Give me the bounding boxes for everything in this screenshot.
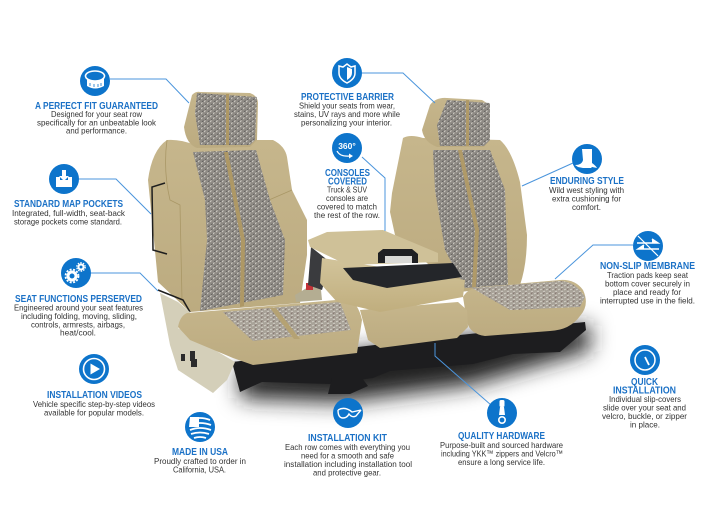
heading: SEAT FUNCTIONS PERSERVED bbox=[15, 294, 142, 305]
text bbox=[549, 185, 624, 212]
text: Shield your seats from wear, bbox=[299, 100, 395, 110]
left seat cushion bbox=[178, 299, 362, 365]
text: Vehicle specific step-by-step videos bbox=[33, 399, 155, 409]
text bbox=[294, 100, 400, 128]
text: storage pockets come standard. bbox=[14, 216, 122, 226]
seat illustration bbox=[148, 92, 586, 394]
text: Truck & SUV bbox=[327, 184, 367, 194]
icon: play bbox=[79, 354, 109, 384]
right headrest bbox=[422, 98, 490, 147]
heading: PROTECTIVE BARRIER bbox=[301, 92, 394, 103]
heading: INSTALLATION KIT bbox=[308, 433, 388, 444]
icon: shield bbox=[332, 58, 362, 88]
icon: non-slip arrows bbox=[633, 231, 663, 261]
console handle bbox=[378, 249, 418, 263]
text: Proudly crafted to order in bbox=[154, 456, 246, 466]
text bbox=[12, 208, 126, 226]
text: slide over your seat and bbox=[603, 402, 686, 412]
icon: zipper bbox=[487, 398, 517, 428]
elastic straps bbox=[152, 183, 190, 312]
callout: non-slip membrane bbox=[555, 231, 695, 306]
heading: ENDURING STYLE bbox=[550, 176, 624, 187]
icon: gauge bbox=[630, 345, 660, 375]
text: place and ready for bbox=[613, 287, 681, 297]
text bbox=[154, 456, 246, 474]
text: extra cushioning for bbox=[552, 194, 621, 204]
left cushion fabric bbox=[223, 302, 351, 341]
icon: pocket bbox=[49, 164, 79, 194]
callout: quick installation bbox=[602, 345, 687, 430]
text bbox=[314, 184, 380, 220]
text: need for a smooth and safe bbox=[301, 450, 394, 460]
connector bbox=[435, 343, 491, 405]
right seat back fabric bbox=[433, 150, 508, 288]
text: and protective gear. bbox=[313, 468, 381, 478]
heading: STANDARD MAP POCKETS bbox=[14, 199, 123, 210]
heading: NON-SLIP MEMBRANE bbox=[600, 261, 695, 272]
heading: QUICK bbox=[631, 377, 658, 388]
text: comfort. bbox=[572, 202, 601, 212]
text: stains, UV rays and more while bbox=[294, 109, 400, 119]
text: Traction pads keep seat bbox=[607, 270, 689, 280]
callout: installation videos bbox=[33, 354, 155, 418]
right headrest fabric bbox=[437, 100, 490, 146]
icon: goggles bbox=[333, 398, 363, 428]
text: including folding, moving, sliding, bbox=[21, 311, 137, 321]
heading bbox=[325, 168, 370, 188]
text: California, USA. bbox=[173, 464, 226, 474]
callout: map pockets bbox=[12, 164, 151, 226]
heading: INSTALLATION bbox=[613, 386, 676, 396]
console lid bbox=[308, 230, 438, 265]
icon: 360: 360° bbox=[338, 141, 356, 151]
callout: protective barrier bbox=[294, 58, 435, 128]
text bbox=[600, 270, 695, 306]
right cushion fabric bbox=[472, 281, 585, 310]
text: the rest of the row. bbox=[314, 210, 380, 220]
console lower body bbox=[320, 258, 465, 312]
right seat back bbox=[390, 136, 527, 292]
text: controls, armrests, airbags, bbox=[31, 320, 125, 330]
connector bbox=[91, 273, 158, 291]
heading bbox=[613, 377, 676, 396]
left seat back panel edge bbox=[166, 140, 292, 300]
icon: flag bbox=[185, 412, 215, 442]
text: consoles are bbox=[326, 193, 368, 203]
icon: gears bbox=[61, 258, 91, 288]
text: velcro, buckle, or zipper bbox=[602, 411, 687, 421]
heading: CONSOLES bbox=[325, 168, 370, 179]
center seat base bbox=[360, 302, 468, 348]
left seat back bbox=[148, 140, 307, 312]
text: including YKK™ zippers and Velcro™ bbox=[441, 448, 563, 458]
text: interrupted use in the field. bbox=[600, 296, 695, 306]
seat switches bbox=[181, 351, 197, 367]
text: in place. bbox=[630, 420, 660, 430]
text: ensure a long service life. bbox=[458, 457, 545, 467]
heading: A PERFECT FIT GUARANTEED bbox=[35, 101, 158, 112]
text: specifically for an unbeatable look bbox=[37, 118, 157, 128]
text: Purpose-built and sourced hardware bbox=[440, 440, 563, 450]
text: heat/cool. bbox=[60, 328, 96, 338]
text: Individual slip-covers bbox=[609, 394, 681, 404]
seat rails bbox=[232, 322, 586, 394]
right seat cushion bbox=[463, 280, 586, 336]
text bbox=[37, 109, 157, 136]
callout: consoles covered bbox=[314, 133, 385, 231]
text: personalizing your interior. bbox=[301, 118, 392, 128]
callout: quality hardware bbox=[435, 343, 563, 467]
connector bbox=[522, 163, 573, 186]
icon: tape measure bbox=[80, 66, 110, 96]
heading: INSTALLATION VIDEOS bbox=[47, 390, 142, 401]
text: Wild west styling with bbox=[549, 185, 624, 195]
text: Integrated, full-width, seat-back bbox=[12, 208, 126, 218]
callout: perfect fit bbox=[35, 66, 189, 136]
text: available for popular models. bbox=[44, 408, 144, 418]
text: Each row comes with everything you bbox=[285, 442, 410, 452]
connector bbox=[79, 179, 151, 214]
text bbox=[602, 394, 687, 430]
seat belt latch bbox=[295, 280, 322, 302]
text bbox=[440, 440, 563, 467]
text bbox=[14, 302, 143, 338]
callout: enduring style bbox=[522, 144, 624, 212]
left headrest fabric bbox=[195, 93, 257, 145]
text: bottom cover securely in bbox=[605, 278, 690, 288]
connector bbox=[362, 73, 435, 103]
left seat back fabric bbox=[193, 150, 285, 311]
callout: made in usa bbox=[154, 412, 246, 474]
console bracket bbox=[308, 247, 330, 290]
callout: seat functions bbox=[14, 258, 158, 338]
left headrest bbox=[184, 92, 258, 148]
text: Engineered around your seat features bbox=[14, 302, 143, 312]
icon: boot bbox=[572, 144, 602, 174]
heading: MADE IN USA bbox=[172, 447, 228, 458]
connector bbox=[555, 245, 633, 279]
text: and performance. bbox=[66, 126, 127, 136]
text bbox=[33, 399, 155, 418]
text: covered to match bbox=[317, 202, 377, 212]
text: installation including installation tool bbox=[284, 459, 412, 469]
callout: installation kit bbox=[284, 398, 412, 478]
heading: QUALITY HARDWARE bbox=[458, 431, 545, 442]
plastic side trim bbox=[160, 293, 235, 393]
text: Designed for your seat row bbox=[51, 109, 143, 119]
console tray bbox=[343, 263, 462, 288]
connector bbox=[362, 157, 385, 231]
heading: COVERED bbox=[328, 176, 367, 188]
text bbox=[284, 442, 412, 478]
floor shadow bbox=[240, 325, 590, 402]
connector bbox=[110, 79, 189, 103]
